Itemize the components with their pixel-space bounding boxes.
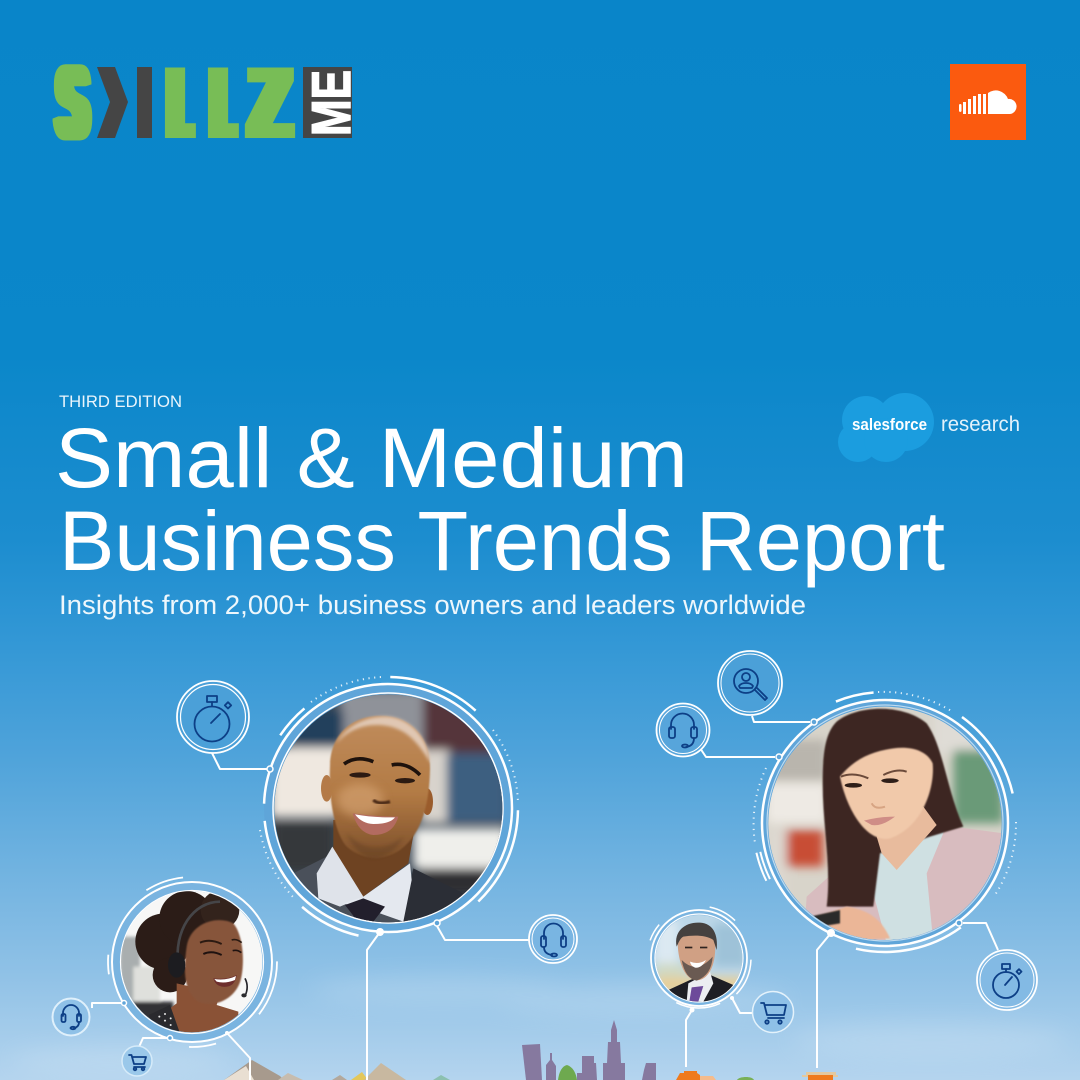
mountains xyxy=(224,1060,450,1080)
icon: headset badge, woman xyxy=(656,704,710,756)
connector nodes xyxy=(122,719,962,1040)
icon: stopwatch badge, man xyxy=(177,681,249,753)
logo: SKILLZ ME: L xyxy=(214,49,232,158)
hair xyxy=(135,914,191,970)
subtitle: Insights from 2,000+ business owners and leaders worldwide xyxy=(59,590,806,620)
icon: SoundCloud badge xyxy=(950,64,1026,140)
tie xyxy=(345,898,385,922)
hair xyxy=(676,923,717,950)
logo: SKILLZ ME: Z xyxy=(251,49,289,157)
neck xyxy=(333,817,417,897)
nose xyxy=(373,800,390,803)
logo: SKILLZ ME: ME xyxy=(300,70,362,136)
icon: stopwatch badge, woman xyxy=(977,950,1037,1010)
title xyxy=(55,411,945,588)
icon: cart badge, man with purple tie xyxy=(752,992,794,1032)
tree xyxy=(558,1065,577,1080)
portrait: woman with phone xyxy=(752,690,1017,954)
brows and eyes xyxy=(344,759,373,764)
logo: SKILLZ ME: S xyxy=(58,44,87,162)
hair xyxy=(823,709,963,907)
logo: salesforce research: salesforce xyxy=(852,416,927,434)
brows, eyes, mouth xyxy=(841,775,868,778)
face xyxy=(185,920,243,1004)
portrait: man with purple tie xyxy=(650,906,752,1009)
logo: SKILLZ ME xyxy=(58,44,362,162)
title: Business Trends Report xyxy=(59,494,945,588)
portrait: woman with headset xyxy=(107,876,278,1048)
label: third edition: THIRD EDITION xyxy=(59,392,182,411)
icon: headset badge, man xyxy=(529,915,577,963)
icon: people search badge xyxy=(718,651,782,715)
ears xyxy=(321,775,332,802)
logo: salesforce research xyxy=(838,393,1020,462)
suit xyxy=(293,857,402,923)
head xyxy=(330,716,430,858)
suit xyxy=(669,975,733,1002)
face xyxy=(840,748,933,839)
portrait: smiling man in suit xyxy=(259,676,520,937)
beard xyxy=(682,957,713,981)
logo: SKILLZ ME: L xyxy=(171,49,189,158)
logo: salesforce research: research xyxy=(941,413,1020,436)
face xyxy=(678,936,716,980)
brows eyes mouth xyxy=(200,941,222,944)
icon: cart badge, headset woman xyxy=(122,1046,152,1076)
title: Small & Medium xyxy=(55,411,688,505)
purple buildings xyxy=(522,1020,656,1080)
neck and chest xyxy=(171,983,238,1032)
beard shadow xyxy=(350,837,400,858)
soft cloud streaks xyxy=(10,976,1070,1074)
skyline and landscape xyxy=(224,1020,838,1080)
neck xyxy=(877,807,937,870)
orange buildings xyxy=(700,1076,716,1080)
hand and phone xyxy=(817,907,890,942)
headset xyxy=(176,900,220,953)
icon: headset badge, headset woman xyxy=(52,998,90,1036)
collar and shirt xyxy=(317,847,363,907)
mouth xyxy=(353,813,398,835)
cardigan and blouse xyxy=(803,827,1003,947)
connector lines xyxy=(92,716,998,1080)
